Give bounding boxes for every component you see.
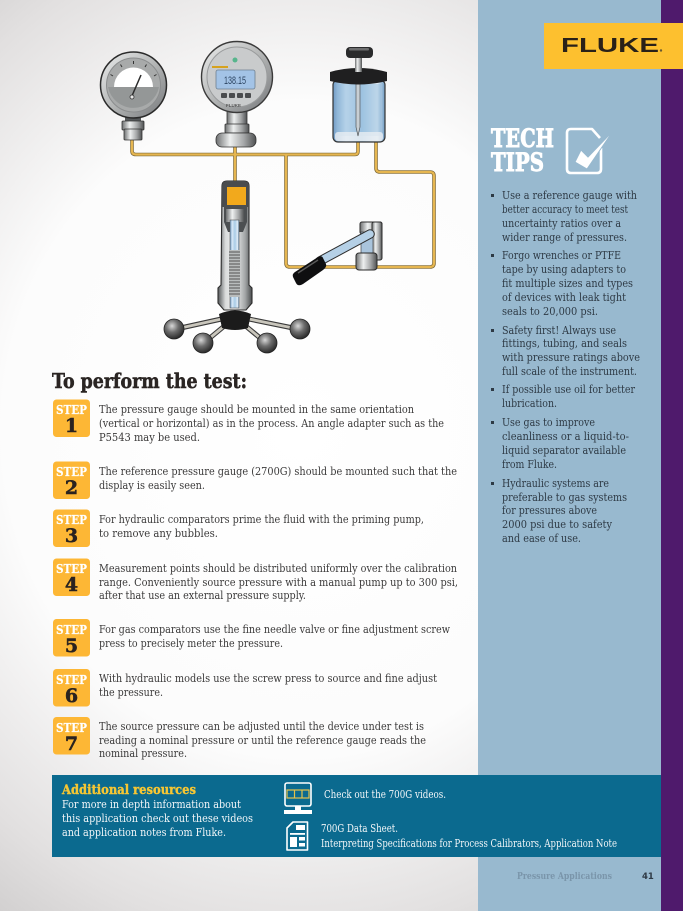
additional resources text: this application check out these videos bbox=[62, 812, 253, 825]
tip texts: seals to 20,000 psi. bbox=[502, 305, 598, 318]
step 3: 3 bbox=[65, 525, 78, 547]
step 7: 7 bbox=[65, 733, 78, 755]
yellow tubing bbox=[132, 140, 434, 267]
step 1: 1 bbox=[65, 415, 78, 437]
step 3: STEP bbox=[56, 513, 87, 527]
step 2: 2 bbox=[65, 477, 78, 499]
icon: data sheet document bbox=[287, 822, 308, 850]
step 7: nominal pressure. bbox=[99, 747, 187, 760]
step 4: Measurement points should be distributed uniformly over the calibration bbox=[99, 562, 457, 575]
panel: additional resources banner bbox=[52, 775, 661, 857]
additional resources text: For more in depth information about bbox=[62, 798, 241, 811]
step 7: reading a nominal pressure or until the reference gauge reads the bbox=[99, 734, 426, 747]
step 5 bbox=[53, 619, 451, 657]
page number: 41 bbox=[642, 872, 654, 882]
tip texts: fit multiple sizes and types bbox=[502, 277, 633, 290]
data sheet link text: 700G Data Sheet. bbox=[321, 822, 398, 835]
step 7: The source pressure can be adjusted until the device under test is bbox=[99, 720, 424, 733]
heading: to perform the test: To perform the test: bbox=[52, 369, 247, 393]
tip texts: Safety first! Always use bbox=[502, 324, 616, 337]
tip texts: 2000 psi due to safety bbox=[502, 518, 613, 531]
tip texts: uncertainty ratios over a bbox=[502, 217, 621, 230]
step 4: STEP bbox=[56, 562, 87, 576]
step 6: the pressure. bbox=[99, 686, 163, 699]
step 1: The pressure gauge should be mounted in the same orientation bbox=[99, 403, 414, 416]
icon: analog pressure gauge bbox=[100, 52, 166, 140]
additional resources text: and application notes from Fluke. bbox=[62, 826, 226, 839]
step 1: STEP bbox=[56, 403, 87, 417]
step 2: STEP bbox=[56, 465, 87, 479]
tip texts: fittings, tubing, and seals bbox=[502, 337, 627, 350]
step 4: 4 bbox=[65, 574, 78, 596]
step 2: The reference pressure gauge (2700G) should be mounted such that the bbox=[99, 465, 457, 478]
base hub bbox=[219, 310, 251, 330]
icon: piston comparator bbox=[164, 181, 310, 353]
tech tips list bbox=[491, 189, 640, 545]
tip texts: full scale of the instrument. bbox=[502, 365, 637, 378]
step 6 bbox=[53, 669, 438, 707]
tip texts: If possible use oil for better bbox=[502, 383, 636, 396]
step 4: range. Conveniently source pressure with a manual pump up to 300 psi, bbox=[99, 576, 458, 589]
step 3: to remove any bubbles. bbox=[99, 527, 218, 540]
logo: Fluke bbox=[544, 23, 683, 69]
step 7: STEP bbox=[56, 721, 87, 735]
icon: priming pump bbox=[293, 222, 382, 285]
heading: tech tips: TECH bbox=[491, 124, 554, 153]
panel: tech tips side column bbox=[478, 0, 661, 911]
step 2: display is easily seen. bbox=[99, 479, 205, 492]
tip texts: Use a reference gauge with bbox=[502, 189, 637, 202]
step 5: press to precisely meter the pressure. bbox=[99, 637, 283, 650]
step 4 bbox=[53, 558, 458, 602]
icon: video monitor bbox=[284, 783, 312, 814]
tip texts: of devices with leak tight bbox=[502, 291, 626, 304]
heading: tech tips bbox=[491, 124, 554, 177]
step 1: P5543 may be used. bbox=[99, 431, 200, 444]
tip texts: for pressures above bbox=[502, 504, 597, 517]
tip texts: better accuracy to meet test bbox=[502, 203, 628, 216]
step 1: (vertical or horizontal) as in the process. An angle adapter such as the bbox=[99, 417, 444, 430]
tip texts: and ease of use. bbox=[502, 532, 581, 545]
tip texts: Forgo wrenches or PTFE bbox=[502, 249, 621, 262]
tip texts: lubrication. bbox=[502, 397, 557, 410]
tip texts: wider range of pressures. bbox=[502, 231, 627, 244]
step 6: 6 bbox=[65, 685, 78, 707]
icon: fluid reservoir bbox=[330, 47, 387, 142]
tip texts: from Fluke. bbox=[502, 458, 557, 471]
tip texts: liquid separator available bbox=[502, 444, 626, 457]
icon: digital reference gauge bbox=[202, 42, 272, 147]
tip texts: Use gas to improve bbox=[502, 416, 595, 429]
logo: Fluke: FLUKE bbox=[561, 34, 659, 57]
step 1 bbox=[53, 400, 444, 444]
tip texts: tape by using adapters to bbox=[502, 263, 626, 276]
data sheet link text bbox=[321, 822, 617, 850]
step 2 bbox=[53, 462, 457, 499]
step 6: With hydraulic models use the screw press to source and fine adjust bbox=[99, 672, 438, 685]
video link text: Check out the 700G videos. bbox=[324, 788, 446, 801]
tip texts bbox=[502, 189, 640, 545]
spokes bbox=[176, 318, 298, 342]
column body bbox=[218, 181, 252, 310]
icon: digital reference gauge: FLUKE bbox=[226, 103, 241, 108]
tip texts: Hydraulic systems are bbox=[502, 477, 609, 490]
footer label: Pressure Applications bbox=[517, 871, 612, 882]
step 7 bbox=[53, 717, 426, 760]
additional resources text bbox=[62, 798, 253, 839]
diagram: comparator pressure test setup bbox=[100, 42, 434, 353]
tip texts: cleanliness or a liquid-to- bbox=[502, 430, 629, 443]
heading: tech tips: TIPS bbox=[491, 148, 544, 177]
icon: digital reference gauge: 138.15 bbox=[224, 75, 246, 87]
step 3 bbox=[53, 510, 424, 547]
step 6: STEP bbox=[56, 673, 87, 687]
additional resources heading: Additional resources bbox=[61, 783, 196, 798]
step 5: STEP bbox=[56, 623, 87, 637]
icon: document with check mark bbox=[567, 129, 613, 173]
tip texts: with pressure ratings above bbox=[502, 351, 640, 364]
step 5: For gas comparators use the fine needle valve or fine adjustment screw bbox=[99, 623, 451, 636]
bullet points bbox=[491, 194, 494, 485]
step 4: after that use an external pressure supply. bbox=[99, 589, 306, 602]
step 5: 5 bbox=[65, 635, 78, 657]
step 3: For hydraulic comparators prime the fluid with the priming pump, bbox=[99, 513, 424, 526]
purple edge band bbox=[661, 0, 683, 911]
page background bbox=[0, 0, 478, 911]
tip texts: preferable to gas systems bbox=[502, 491, 627, 504]
